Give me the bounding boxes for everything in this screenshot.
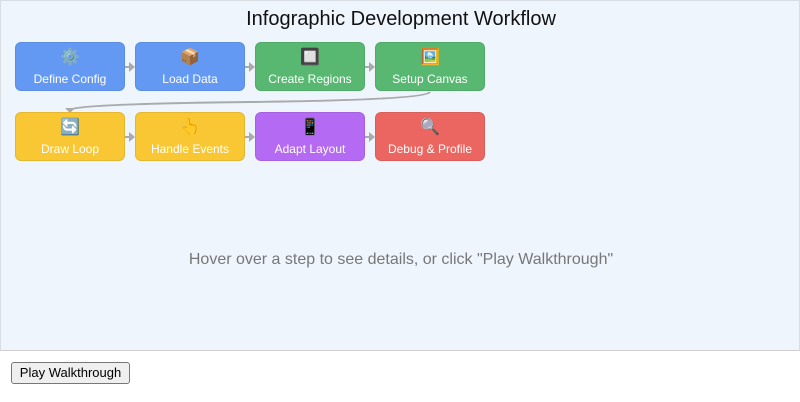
button: Play Walkthrough [20,365,121,380]
step: Handle Events: 👆 [180,117,200,136]
step: Define Config: Define Config [34,72,106,86]
step: Draw Loop: Draw Loop [41,142,99,156]
hint text: Hover over a step to see details, or click "Play Walkthrough" [189,251,613,268]
step: Define Config [15,42,125,91]
step: Define Config: ⚙ [60,47,80,66]
step: Handle Events: Handle Events [151,142,229,156]
step: Setup Canvas [375,42,485,91]
step: Adapt Layout: Adapt Layout [275,142,345,156]
step: Handle Events [135,112,245,161]
step: Create Regions: Create Regions [268,72,352,86]
step: Debug & Profile [375,112,485,161]
step: Load Data [135,42,245,91]
step: Load Data: 📦 [180,47,200,66]
step: Setup Canvas: 🖼️ [420,47,440,66]
step: Create Regions: 🔲 [300,47,320,66]
step: Debug & Profile: 🔍 [420,117,440,136]
step: Adapt Layout [255,112,365,161]
step: Setup Canvas: Setup Canvas [392,72,468,86]
step: Draw Loop: 🔄 [60,117,80,136]
step: Load Data: Load Data [162,72,218,86]
button [11,362,130,384]
step: Draw Loop [15,112,125,161]
step: Adapt Layout: 📱 [300,117,320,136]
title: Infographic Development Workflow [246,8,556,30]
step: Create Regions [255,42,365,91]
step: Debug & Profile: Debug & Profile [388,142,472,156]
